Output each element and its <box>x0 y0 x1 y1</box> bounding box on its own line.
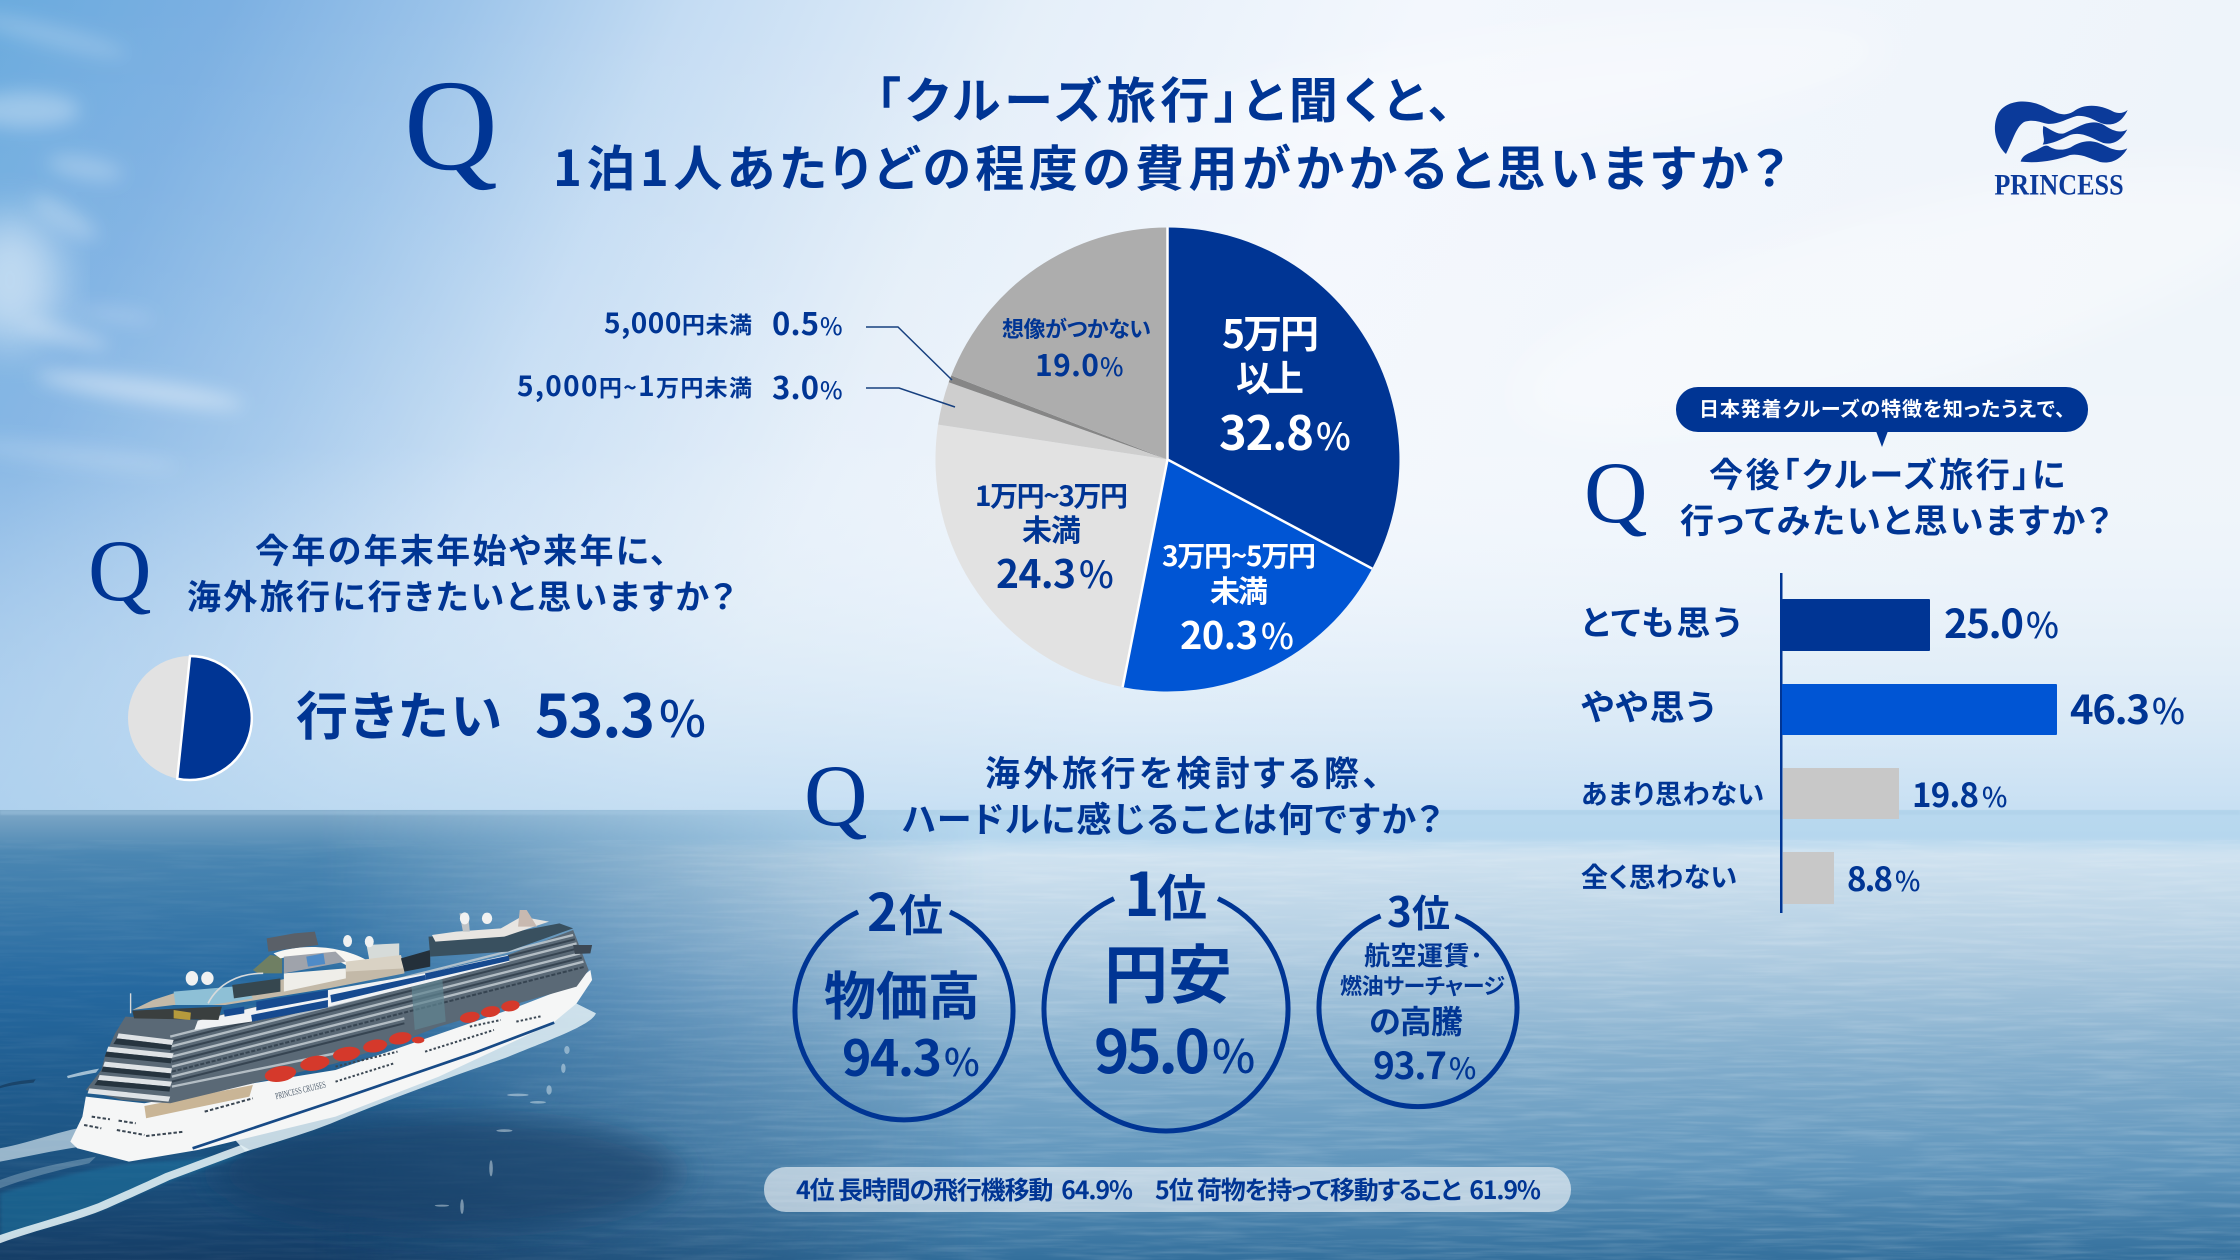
result text <box>296 669 706 754</box>
Q mark: Q <box>1584 445 1648 542</box>
rank 3 circle: 93.7 <box>1373 1036 1447 1090</box>
rank 2 circle: % <box>944 1032 980 1087</box>
rank 3 circle: 航空運賃･ <box>1364 936 1483 973</box>
outside label: 5,000円未満 0.5%: % <box>820 307 843 342</box>
pie label: 5万円以上: 32.8 <box>1219 395 1314 464</box>
lifeboats <box>263 999 521 1084</box>
pie label: 3万円~5万円未満: 未満 <box>1210 567 1268 611</box>
rank 3 circle <box>1319 879 1517 1107</box>
pie label: 想像がつかない: 想像がつかない <box>1002 312 1151 344</box>
bar: 全く思わない: 全く思わない <box>1581 856 1737 895</box>
question text: ハードルに感じることは何ですか？ <box>902 792 1442 843</box>
callout bubble: 日本発着クルーズの特徴を知ったうえで、 <box>1699 393 2065 422</box>
hull windows <box>84 1016 542 1136</box>
hull <box>70 970 592 1162</box>
bar: あまり思わない: % <box>1982 776 2007 815</box>
question text: 今年の年末年始や来年に、 <box>255 524 667 573</box>
pie label: 1万円~3万円未満: 1万円~3万円 <box>975 475 1128 515</box>
pill: rank 4 and 5: 4位 長時間の飛行機移動 64.9% <box>796 1171 1133 1207</box>
pie label: 5万円以上: % <box>1316 407 1351 461</box>
pie label: 3万円~5万円未満: 3万円~5万円 <box>1162 535 1316 575</box>
rank 3 circle: 燃油サーチャージ <box>1340 969 1505 1001</box>
small pie chart: 53.3% <box>128 656 252 780</box>
pie label: 5万円以上: 以上 <box>1236 350 1304 402</box>
bar: やや思う: やや思う <box>1581 680 1715 731</box>
bar: あまり思わない: 19.8 <box>1912 769 1979 817</box>
bar: あまり思わない: あまり思わない <box>1581 773 1764 812</box>
upper works <box>132 965 404 1010</box>
outside label: 5,000円未満 0.5%: 0.5 <box>772 299 819 344</box>
question text: 行ってみたいと思いますか？ <box>1680 494 2111 543</box>
bar: あまり思わない <box>1581 768 2007 819</box>
bar: とても思う: とても思う <box>1581 596 1741 645</box>
callout bubble <box>1676 387 2088 447</box>
result text: % <box>659 680 706 752</box>
photo: cruise ship at sea: PRINCESS CRUISES <box>275 1081 327 1102</box>
pie label: 想像がつかない <box>1002 312 1151 385</box>
pie label: 3万円~5万円未満: % <box>1261 609 1294 660</box>
pie slices <box>935 228 1399 691</box>
pie label: 1万円~3万円未満: 未満 <box>1022 506 1081 550</box>
outside label: 5,000円~1万円未満 3.0% <box>517 363 955 408</box>
logo wordmark: PRINCESS <box>1994 169 2124 202</box>
pie label: 3万円~5万円未満: 20.3 <box>1180 605 1258 660</box>
bar: 全く思わない <box>1581 852 1920 904</box>
Q mark: Q <box>804 748 868 845</box>
Q mark: Q <box>404 54 498 198</box>
rank 2 circle: 2 <box>867 871 898 946</box>
main question <box>404 54 1787 201</box>
main question heading <box>553 62 1787 201</box>
rank 3 circle: 3 <box>1387 879 1412 940</box>
Q mark: Q <box>88 523 152 620</box>
rank 1 circle: 円安 <box>1104 925 1232 1017</box>
main question heading: 1泊1人あたりどの程度の費用がかかると思いますか？ <box>553 130 1787 201</box>
pill: rank 4 and 5 <box>764 1167 1571 1212</box>
outside label: 5,000円未満 0.5%: 5,000円未満 <box>604 302 752 342</box>
bar: 全く思わない: % <box>1895 860 1920 899</box>
rank 1 circle <box>1044 847 1288 1131</box>
question text <box>902 746 1442 843</box>
panel: overseas travel intent <box>88 523 735 780</box>
logo mark: flowing hair and waves <box>1995 102 2128 163</box>
wake and dark water <box>0 1003 679 1243</box>
axis <box>1780 573 1782 913</box>
rank 1 circle: % <box>1212 1021 1255 1087</box>
rank 3 circle: の高騰 <box>1369 997 1463 1043</box>
question text: 海外旅行に行きたいと思いますか？ <box>187 570 735 619</box>
rank 2 circle: 物価高 <box>824 955 980 1030</box>
outside label: 5,000円~1万円未満 3.0%: % <box>820 371 843 406</box>
bar: とても思う: 25.0 <box>1944 592 2024 650</box>
rank 2 circle <box>795 871 1013 1120</box>
main pie chart: cost per night per person <box>517 228 1399 691</box>
pie label: 1万円~3万円未満 <box>975 475 1128 600</box>
result text: 53.3 <box>535 669 655 754</box>
rank 3 circle: 位 <box>1412 883 1450 938</box>
question text: 海外旅行を検討する際、 <box>985 746 1380 797</box>
question text: 今後「クルーズ旅行」に <box>1709 448 2065 497</box>
question text <box>1680 448 2111 543</box>
pie label: 1万円~3万円未満: 24.3 <box>996 544 1076 600</box>
rank 1 circle: 95.0 <box>1094 1004 1210 1091</box>
bar: やや思う: 46.3 <box>2070 678 2150 736</box>
outside label: 5,000円未満 0.5% <box>604 299 952 380</box>
blue hull stripes <box>194 955 509 1030</box>
beige stern deck <box>144 1085 253 1118</box>
pie label: 想像がつかない: % <box>1100 348 1123 384</box>
decks <box>86 930 589 1103</box>
question text <box>187 524 735 619</box>
bar: とても思う <box>1581 592 2059 651</box>
rank 3 circle: % <box>1449 1046 1476 1088</box>
bar: やや思う: % <box>2152 684 2185 735</box>
rank 1 circle: 位 <box>1157 859 1207 931</box>
panel: hurdles for overseas travel <box>764 746 1571 1212</box>
result text: 行きたい <box>296 675 502 750</box>
photo: cruise ship at sea <box>0 910 679 1243</box>
rank 1 circle: 1 <box>1124 847 1159 934</box>
panel: future cruise intent <box>1581 387 2185 913</box>
outside label: 5,000円~1万円未満 3.0%: 5,000円~1万円未満 <box>517 365 752 405</box>
pie label: 想像がつかない: 19.0 <box>1035 341 1099 385</box>
pie label: 5万円以上 <box>1219 304 1351 464</box>
main question heading: 「クルーズ旅行」と聞くと、 <box>876 62 1452 133</box>
rank 2 circle: 位 <box>899 880 943 944</box>
rank 2 circle: 94.3 <box>842 1019 942 1091</box>
pill: rank 4 and 5: 5位 荷物を持って移動すること 61.9% <box>1155 1171 1541 1207</box>
bar chart <box>1581 573 2185 913</box>
bar: とても思う: % <box>2026 598 2059 649</box>
pie label: 1万円~3万円未満: % <box>1079 545 1114 599</box>
outside label: 5,000円~1万円未満 3.0%: 3.0 <box>772 363 819 408</box>
logo: Princess <box>1994 102 2128 202</box>
pie label: 5万円以上: 5万円 <box>1222 304 1319 360</box>
pie label: 3万円~5万円未満 <box>1162 535 1316 660</box>
bar: 全く思わない: 8.8 <box>1847 853 1893 901</box>
bar: やや思う <box>1581 678 2185 736</box>
